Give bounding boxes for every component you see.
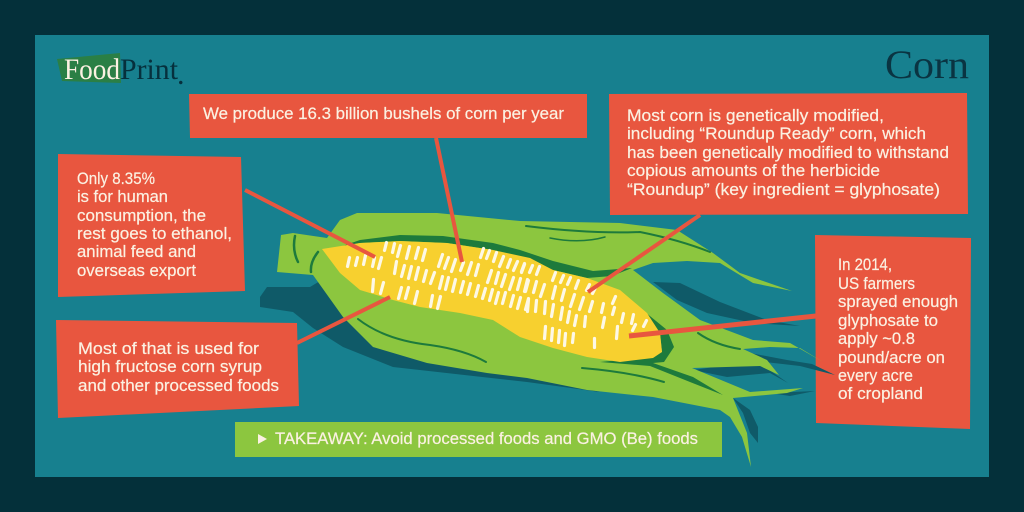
logo: FoodPrint bbox=[57, 53, 184, 91]
callout: glyphosate 2014: apply ~0.8 bbox=[838, 330, 915, 348]
callout: glyphosate 2014: of cropland bbox=[838, 385, 923, 403]
connector lines bbox=[245, 138, 816, 343]
husk dark creases bbox=[294, 226, 740, 382]
callout: human consumption: overseas export bbox=[77, 262, 196, 280]
takeaway banner: TAKEAWAY: Avoid processed foods and GMO (Be) foods bbox=[275, 430, 698, 448]
takeaway banner bbox=[235, 422, 722, 457]
callout: human consumption: animal feed and bbox=[77, 243, 196, 261]
callout: human consumption: consumption, the bbox=[77, 207, 206, 225]
husk bbox=[277, 213, 823, 467]
husk fold over corn bbox=[337, 235, 723, 395]
callout: glyphosate 2014: glyphosate to bbox=[838, 312, 938, 330]
callout: processed foods: Most of that is used for bbox=[78, 340, 260, 358]
corn cob bbox=[322, 241, 662, 362]
corn kernels bbox=[348, 242, 646, 348]
callout: processed foods: high fructose corn syrup bbox=[78, 358, 262, 376]
husk shadows bbox=[260, 275, 835, 443]
callout: production bbox=[189, 94, 587, 138]
callout: glyphosate 2014: In 2014, bbox=[838, 256, 892, 274]
callout: human consumption: Only 8.35% bbox=[77, 170, 155, 188]
title: Corn: Corn bbox=[885, 42, 969, 87]
callout: processed foods: and other processed foods bbox=[78, 377, 279, 395]
logo: FoodPrint: Print bbox=[120, 53, 179, 86]
callout: genetically modified bbox=[609, 93, 968, 215]
callout: genetically modified: “Roundup” (key ingredient = glyphosate) bbox=[627, 181, 940, 199]
callout: genetically modified: copious amounts of the herbicide bbox=[627, 162, 880, 180]
callout: genetically modified: has been genetically modified to withstand bbox=[627, 144, 949, 162]
logo: FoodPrint: Food bbox=[64, 53, 120, 86]
callout: human consumption bbox=[58, 154, 245, 297]
callout: glyphosate 2014 bbox=[815, 235, 971, 429]
callout: production: We produce 16.3 billion bushels of corn per year bbox=[203, 105, 565, 123]
callout: glyphosate 2014: every acre bbox=[838, 367, 913, 385]
callout: genetically modified: including “Roundup Ready” corn, which bbox=[627, 125, 926, 143]
logo: FoodPrint: . bbox=[177, 58, 184, 91]
callout: genetically modified: Most corn is genetically modified, bbox=[627, 107, 884, 125]
callout: glyphosate 2014: sprayed enough bbox=[838, 293, 958, 311]
illustration: ear of corn bbox=[260, 213, 835, 467]
callout: glyphosate 2014: pound/acre on bbox=[838, 349, 945, 367]
callout: human consumption: is for human bbox=[77, 188, 168, 206]
callout: human consumption: rest goes to ethanol, bbox=[77, 225, 232, 243]
callout: processed foods bbox=[56, 320, 299, 418]
callout: glyphosate 2014: US farmers bbox=[838, 275, 915, 293]
